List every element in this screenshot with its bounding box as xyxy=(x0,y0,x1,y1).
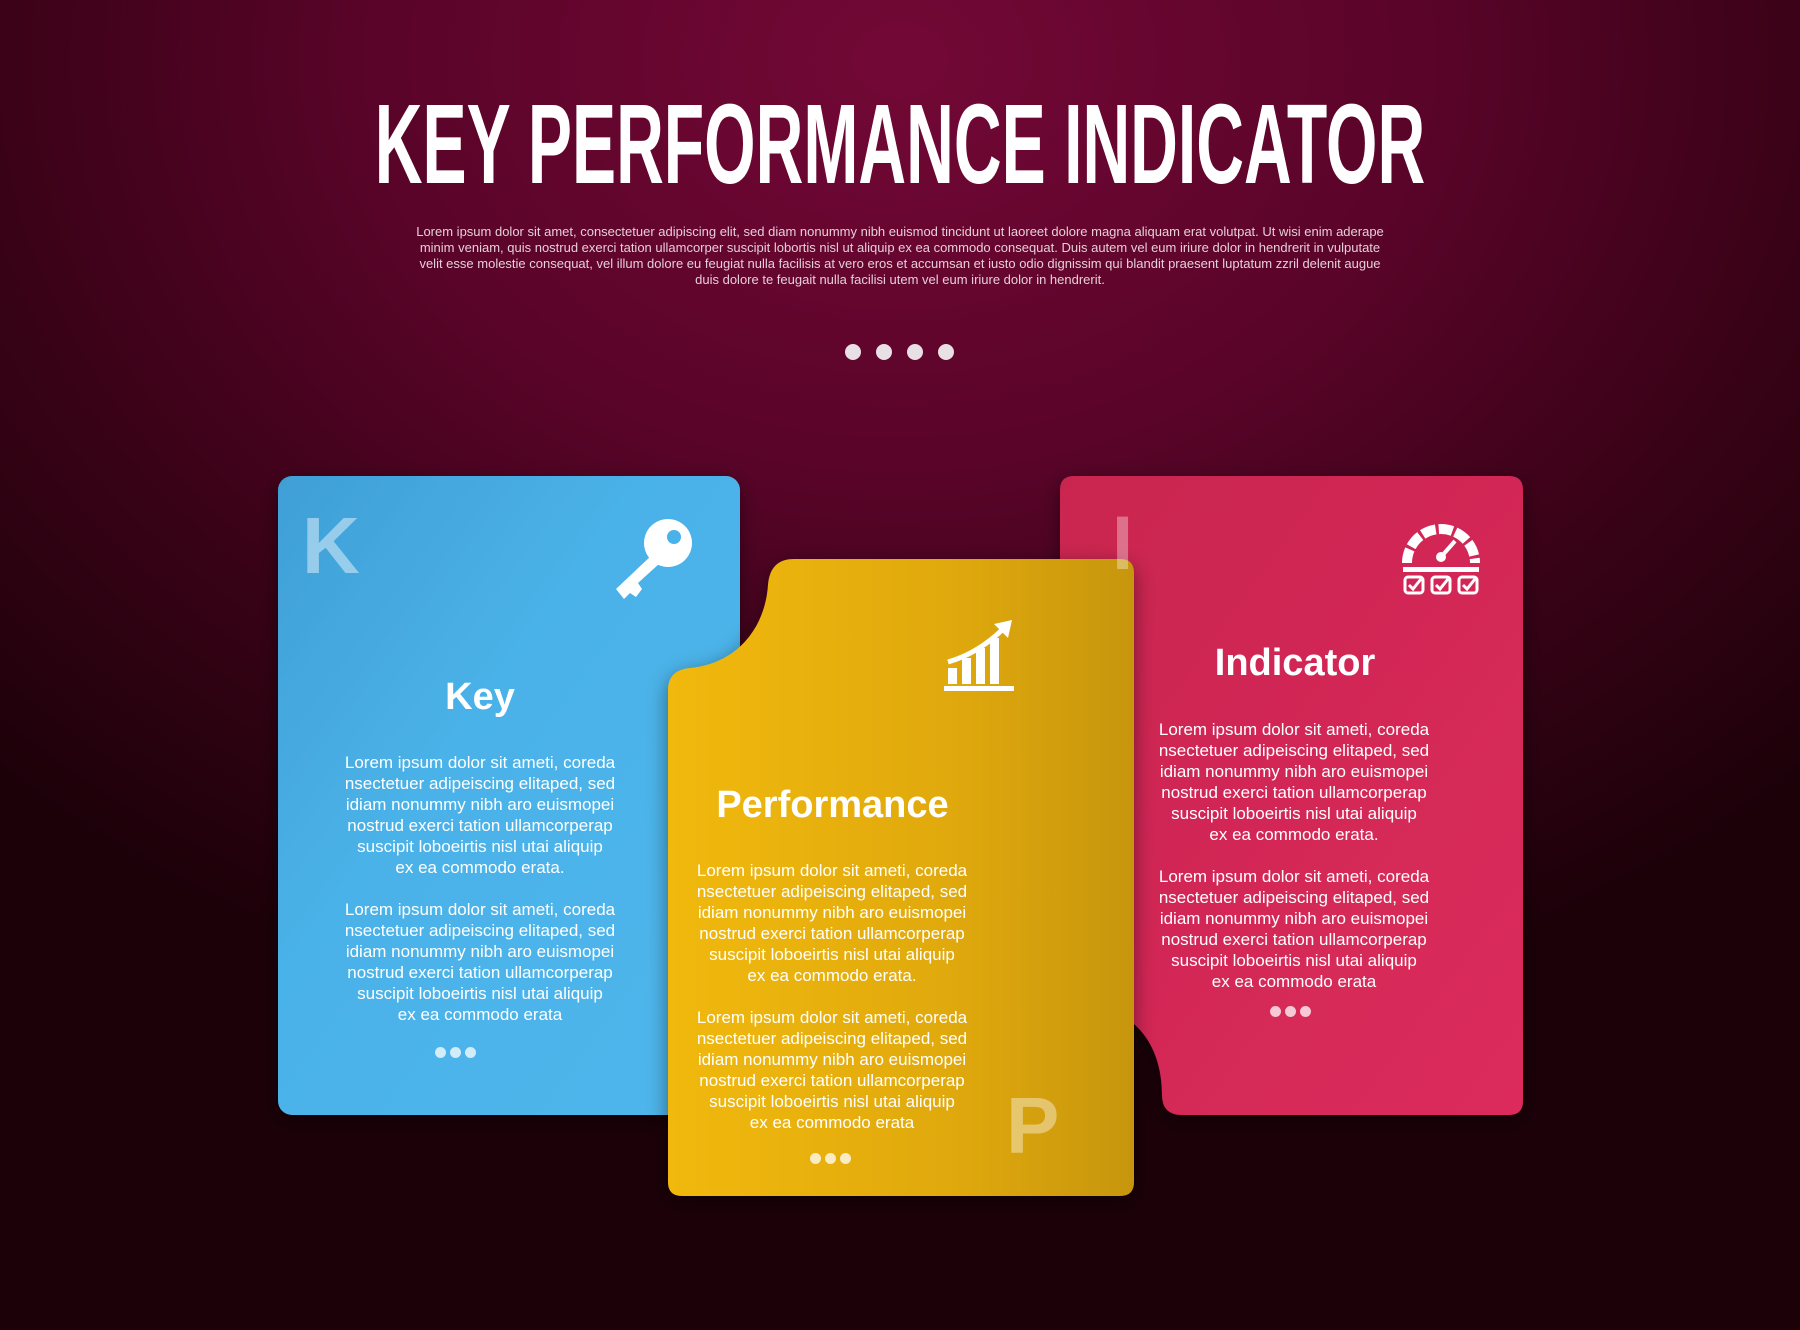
text: indicator paragraphs: Lorem ipsum dolor sit ameti, coreda xyxy=(1159,867,1429,886)
dots: performance xyxy=(810,1153,851,1164)
text: performance paragraphs: ex ea commodo erata. xyxy=(747,966,917,985)
text: key paragraphs: nsectetuer adipeiscing elitaped, sed xyxy=(345,774,615,793)
text: key paragraphs xyxy=(345,753,616,1024)
text: indicator paragraphs: nostrud exerci tation ullamcorperap xyxy=(1161,930,1427,949)
heading: Key: Key xyxy=(445,676,515,718)
text: key paragraphs: Lorem ipsum dolor sit ameti, coreda xyxy=(345,900,615,919)
text: key paragraphs: suscipit loboeirtis nisl utai aliquip xyxy=(357,837,603,856)
description text: duis dolore te feugait nulla facilisi utem vel eum iriure dolor in hendrerit. xyxy=(695,272,1105,287)
text: indicator paragraphs: nostrud exerci tation ullamcorperap xyxy=(1161,783,1427,802)
card: indicator (red) xyxy=(1060,476,1523,1115)
description text xyxy=(416,224,1384,287)
text: performance paragraphs: idiam nonummy nibh aro euismopei xyxy=(698,1050,966,1069)
text: indicator paragraphs: suscipit loboeirtis nisl utai aliquip xyxy=(1171,804,1417,823)
text: key paragraphs: nostrud exerci tation ullamcorperap xyxy=(347,816,613,835)
title: KEY PERFORMANCE INDICATOR xyxy=(375,81,1425,207)
card: performance (yellow) xyxy=(668,559,1134,1196)
text: key paragraphs: suscipit loboeirtis nisl utai aliquip xyxy=(357,984,603,1003)
text: key paragraphs: Lorem ipsum dolor sit ameti, coreda xyxy=(345,753,615,772)
text: indicator paragraphs: idiam nonummy nibh aro euismopei xyxy=(1160,909,1428,928)
icon: growth chart xyxy=(944,620,1014,691)
text: indicator paragraphs: ex ea commodo erata. xyxy=(1209,825,1379,844)
text: performance paragraphs: idiam nonummy nibh aro euismopei xyxy=(698,903,966,922)
letter K: K xyxy=(302,501,360,590)
text: key paragraphs: ex ea commodo erata xyxy=(398,1005,562,1024)
icon: gauge dashboard xyxy=(1402,524,1480,594)
letter P: P xyxy=(1006,1081,1059,1170)
icon: key xyxy=(616,519,692,599)
text: performance paragraphs: nsectetuer adipeiscing elitaped, sed xyxy=(697,882,967,901)
text: key paragraphs: nostrud exerci tation ullamcorperap xyxy=(347,963,613,982)
text: performance paragraphs: suscipit loboeirtis nisl utai aliquip xyxy=(709,1092,955,1111)
dots: key xyxy=(435,1047,476,1058)
text: key paragraphs: idiam nonummy nibh aro euismopei xyxy=(346,795,614,814)
text: performance paragraphs: suscipit loboeirtis nisl utai aliquip xyxy=(709,945,955,964)
letter I: I xyxy=(1112,501,1133,586)
text: indicator paragraphs: ex ea commodo erata xyxy=(1212,972,1376,991)
text: performance paragraphs: nostrud exerci tation ullamcorperap xyxy=(699,924,965,943)
decorative dots row xyxy=(845,344,954,360)
text: performance paragraphs: ex ea commodo erata xyxy=(750,1113,914,1132)
dots: indicator xyxy=(1270,1006,1311,1017)
heading: Performance: Performance xyxy=(716,784,949,826)
text: key paragraphs: ex ea commodo erata. xyxy=(395,858,565,877)
heading: Indicator: Indicator xyxy=(1215,642,1375,684)
description text: velit esse molestie consequat, vel illum dolore eu feugiat nulla facilisis at vero eros et accumsan et iusto odio dignissim qui blandit praesent luptatum zzril delenit augue xyxy=(419,256,1381,271)
text: performance paragraphs: nostrud exerci tation ullamcorperap xyxy=(699,1071,965,1090)
text: indicator paragraphs: idiam nonummy nibh aro euismopei xyxy=(1160,762,1428,781)
description text: minim veniam, quis nostrud exerci tation ullamcorper suscipit lobortis nisl ut aliquip ex ea commodo consequat. Duis autem vel eum iriure dolor in hendrerit in vulputate xyxy=(420,240,1380,255)
text: indicator paragraphs: Lorem ipsum dolor sit ameti, coreda xyxy=(1159,720,1429,739)
description text: Lorem ipsum dolor sit amet, consectetuer adipiscing elit, sed diam nonummy nibh euismod tincidunt ut laoreet dolore magna aliquam erat volutpat. Ut wisi enim aderape xyxy=(416,224,1384,239)
text: indicator paragraphs xyxy=(1159,720,1430,991)
text: indicator paragraphs: nsectetuer adipeiscing elitaped, sed xyxy=(1159,888,1429,907)
text: key paragraphs: nsectetuer adipeiscing elitaped, sed xyxy=(345,921,615,940)
text: indicator paragraphs: nsectetuer adipeiscing elitaped, sed xyxy=(1159,741,1429,760)
text: key paragraphs: idiam nonummy nibh aro euismopei xyxy=(346,942,614,961)
text: performance paragraphs xyxy=(697,861,968,1132)
card: key (blue) xyxy=(278,476,740,1115)
text: performance paragraphs: Lorem ipsum dolor sit ameti, coreda xyxy=(697,861,967,880)
text: performance paragraphs: nsectetuer adipeiscing elitaped, sed xyxy=(697,1029,967,1048)
text: indicator paragraphs: suscipit loboeirtis nisl utai aliquip xyxy=(1171,951,1417,970)
text: performance paragraphs: Lorem ipsum dolor sit ameti, coreda xyxy=(697,1008,967,1027)
